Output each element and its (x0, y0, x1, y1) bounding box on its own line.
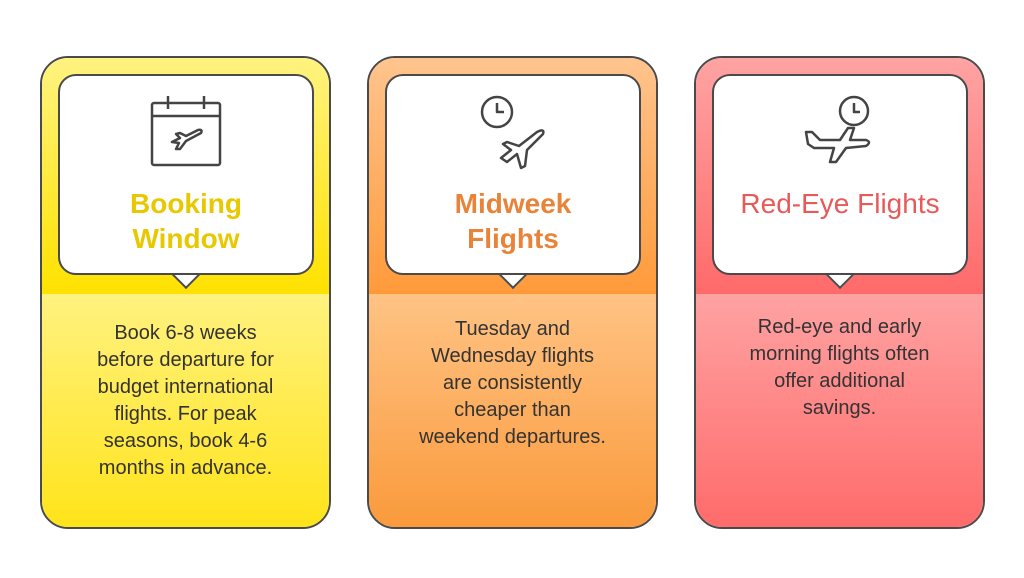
title (455, 188, 572, 254)
title: Booking (130, 188, 242, 219)
body text: months in advance. (99, 457, 272, 479)
body text: before departure for (97, 349, 274, 371)
card: booking window (40, 56, 331, 529)
body text (97, 322, 274, 479)
body text: Book 6-8 weeks (114, 322, 257, 344)
body text: flights. For peak (114, 403, 257, 425)
white box (58, 74, 314, 275)
title: Midweek (455, 188, 571, 219)
body text: cheaper than (454, 399, 571, 421)
body text: weekend departures. (419, 426, 606, 448)
body text: morning flights often (749, 343, 930, 365)
body text (749, 316, 930, 419)
icon: clock plane (480, 96, 545, 170)
icon: calendar plane (150, 96, 222, 166)
icon: plane clock (804, 96, 870, 164)
title: Window (132, 223, 240, 254)
card: midweek flights (367, 56, 658, 529)
white box (385, 74, 641, 275)
body text (419, 318, 606, 448)
title (130, 188, 242, 254)
body text: offer additional (774, 370, 905, 392)
white box (712, 74, 968, 275)
body text: Wednesday flights (431, 345, 594, 367)
body text: Red-eye and early (758, 316, 921, 338)
body text: savings. (803, 397, 876, 419)
card: red-eye flights (694, 56, 985, 529)
title: Red-Eye Flights (740, 188, 940, 219)
body text: are consistently (443, 372, 582, 394)
body text: budget international (98, 376, 273, 398)
title: Flights (467, 223, 559, 254)
body text: Tuesday and (455, 318, 570, 340)
body text: seasons, book 4-6 (104, 430, 267, 452)
